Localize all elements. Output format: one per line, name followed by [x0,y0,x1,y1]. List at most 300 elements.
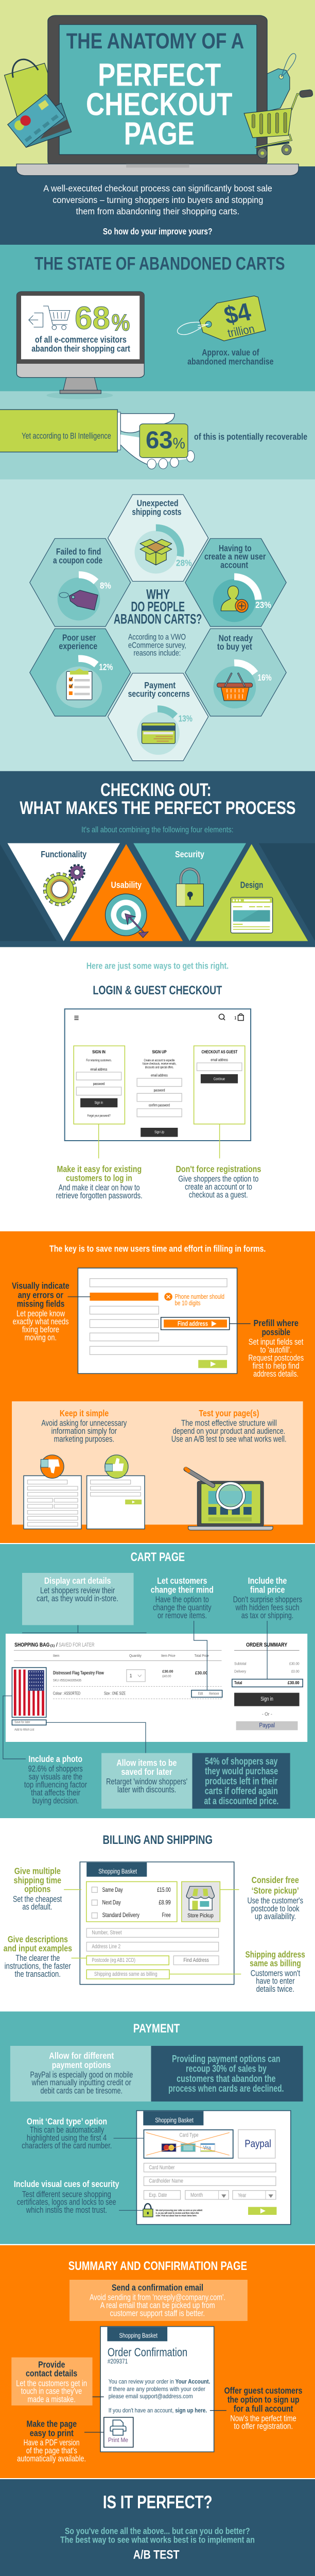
tip: easy to print: automatically available. [17,2454,86,2463]
intro text: them from abandoning their shopping carts. [76,206,239,216]
tip: confirmation email: Send a confirmation email [112,2282,203,2293]
form: sign up: email address [151,1073,168,1078]
heading: why do people abandon carts [114,587,202,627]
mockup: payment form [136,2111,291,2225]
caption: abandoned merchandise: Approx. value of [202,347,259,358]
icon: shopping cart [244,90,313,158]
shipping options: Standard Delivery [102,1911,139,1919]
icon: target with arrow [106,894,148,938]
address fields: Find Address [183,1957,209,1963]
tip: saved for later: later with discounts. [117,1785,176,1794]
bag header: SHOPPING BAG [14,1641,49,1648]
order heading: #209371 [108,2358,128,2365]
product details: £40.00 [162,1675,171,1678]
tip: keep it simple [41,1408,127,1444]
icon: 4 trillion price tag [178,296,266,341]
order summary: Subtotal [234,1662,247,1666]
tip: indicate errors: moving on. [25,1333,57,1342]
tip: contact details: Provide [38,2360,65,2370]
tip: keep it simple: Avoid asking for unnecessary [41,1418,127,1428]
connector lines [84,2397,226,2432]
product details: Distressed Flag Tapestry Flow [53,1671,104,1676]
survey note: According to a VWO [128,632,186,641]
panel: summary and confirmation page [11,2259,302,2463]
hexagon: payment security concerns: Payment [144,680,176,690]
laptop [16,15,299,176]
tip: payment options: when manually inputting credit or [31,2078,131,2087]
product details: 1 [130,1673,132,1679]
shipping options: Free [162,1911,171,1919]
icon: exit arrow [29,313,43,327]
hexagon: failed to find a coupon code [30,538,131,626]
icon: 4 trillion price tag: trillion [226,323,256,340]
order summary: £30.00 [288,1681,300,1685]
short form with thumbs up [87,1455,145,1529]
form: sign up: confirm password [149,1103,170,1108]
triangle: security: Security [175,849,204,860]
triangle: functionality: Functionality [41,849,86,860]
tip: indicate errors: fixing before [22,1325,59,1334]
card fields: Exp. Date [149,2192,167,2198]
product details: £30.00 [195,1670,207,1675]
form: sign in: For returning customers. [86,1059,112,1062]
hexagon: payment security concerns: 13% [179,714,192,723]
monitor: 68 percent stat [16,292,144,399]
security notice: it, so you will need to receive and then return the [155,2212,199,2215]
tip: keep it simple: information simply for [51,1426,117,1436]
print button [104,2417,133,2447]
hexagon: unexpected shipping costs: shipping costs [132,507,181,517]
tip: visual cues of security [14,2179,119,2215]
order body text: If there are any problems with your order [109,2385,205,2393]
tip: change their mind: or remove items. [157,1611,207,1620]
shipping options: £15.00 [157,1886,171,1893]
mockup: billing form [80,1862,234,1985]
title: THE ANATOMY OF A [66,28,244,53]
icon: price tag [265,54,296,112]
icon: thumbs up [105,1455,128,1478]
tip: same as billing: details twice. [256,1984,294,1994]
triangle: usability [70,844,183,941]
triangle: usability: Usability [111,880,142,890]
form: guest checkout: Continue [214,1077,225,1081]
error message: be 10 digits [175,1300,201,1307]
security notice [155,2209,203,2217]
tip: descriptions: and input examples [4,1943,72,1954]
triangle: design [196,844,308,941]
triangle: security [133,843,246,941]
tab: Shopping Basket [98,1868,137,1875]
stat: 68%: 68 [75,300,110,336]
order body text: If you don't have an account, sign up here. [109,2407,207,2414]
tab [143,2111,203,2125]
stat: 54 percent of shoppers [192,1753,290,1809]
address fields: Shipping address same as billing [94,1971,157,1977]
triangle: functionality [7,843,120,941]
order summary: Paypal [259,1722,275,1728]
intro text [43,183,272,236]
card fields: Month [190,2192,203,2198]
tip: confirmation email: Avoid sending it from 'noreply@company.com'. [90,2293,225,2302]
product details: SKU #5532443355435 [53,1678,81,1682]
hand holding 63 percent card [0,410,195,469]
address fields [86,1928,219,1979]
tip: change their mind: Have the option to [155,1595,209,1604]
tip: indicate errors: Let people know [16,1309,65,1318]
panel: why do people abandon carts [30,495,286,761]
tip: prefill: to 'autofill'. [260,1345,292,1354]
stat: 68%: % [112,310,130,336]
icon: gears [45,866,84,904]
panel: payment [10,2021,303,2225]
tip: payment options: Allow for different [49,2050,114,2061]
connector lines [68,1297,251,1324]
icon: cart bag [238,1014,243,1021]
panel: save new users time [12,1244,304,1530]
triangle background [0,843,315,941]
tip: existing customers: customers to log in [66,1173,132,1183]
intro text [60,2526,255,2545]
icon: error x [164,1293,172,1301]
hexagon: unexpected shipping costs: 28% [176,558,192,568]
tip: omit card type: Omit ‘Card type’ option [27,2116,107,2127]
error message [175,1293,224,1307]
product details: Size : ONE SIZE [104,1691,126,1696]
heading: billing and shipping: BILLING AND SHIPPING [102,1833,213,1847]
icon: menu [74,1016,79,1020]
icon: clipboard [66,668,92,700]
title: PAGE [124,116,195,151]
tip: don't force registrations [176,1164,261,1199]
tip: final price: Include the [248,1575,287,1586]
find address button [161,1317,230,1330]
icon: secure payment card [142,723,175,743]
tip: keep it simple: Keep it simple [60,1408,109,1419]
tip: contact details: Let the customers get in [16,2379,87,2388]
order heading [108,2346,187,2365]
bag header: Total Price [195,1654,209,1658]
heading [20,781,296,818]
mockup: order confirmation [100,2327,214,2452]
tab [107,2327,167,2341]
tip: include a photo: that affects their [31,1788,80,1798]
caption: abandoned merchandise: abandoned merchandise [187,357,274,366]
order summary: Delivery [234,1669,246,1673]
connector lines [114,2138,144,2210]
order body text [109,2378,210,2414]
tip: existing customers: Make it easy for existing [57,1164,142,1175]
heading: CART PAGE [131,1550,185,1564]
panel: is it perfect [10,2493,305,2576]
tip: contact details [11,2358,93,2405]
icon: browser window [231,897,273,933]
tip: payment options: debit cards can be tiresome. [40,2086,122,2095]
heading: IS IT PERFECT? [103,2493,213,2513]
hexagon: not ready to buy yet: to buy yet [217,641,252,652]
form: guest checkout [194,1046,245,1124]
card type option crossed out [144,2130,233,2158]
intro text: So how do your improve yours? [103,226,213,236]
tip: saved for later: saved for later [121,1767,172,1777]
tip: easy to print: Have a PDF version [24,2438,80,2447]
caption: of all e-commerce visitors [35,334,127,345]
product details: £30.00 [162,1669,173,1673]
triangle: design: Design [240,880,263,890]
address fields: Address Line 2 [92,1943,120,1950]
security notice: order. Find out about how to return items here. [155,2214,197,2217]
form: sign in: Sign in [94,1100,103,1105]
stat: 54 percent of shoppers: products left in their [205,1776,277,1787]
icon: 4 trillion price tag: $4 [221,298,254,330]
shipping options [86,1882,177,1922]
hand holding 63 percent card: 63 [146,426,173,453]
tip: saved for later [101,1753,192,1809]
tip: descriptions [4,1934,72,1979]
icon: printer [110,2420,126,2435]
caption: abandoned merchandise [187,347,274,366]
product photo: flag [12,1668,46,1717]
find address button: Find address [178,1320,208,1327]
mockup: form [78,1268,237,1374]
icon: open box [140,539,172,565]
card fields: Year [238,2192,247,2198]
tip: descriptions: Give descriptions [8,1934,68,1945]
tip: indicate errors: Visually indicate [12,1281,69,1291]
order summary: £30.00 [289,1662,300,1666]
tip: payment options: PayPal is especially good on mobile [30,2070,133,2079]
card fields [144,2163,276,2199]
tip: include a photo: 92.6% of shoppers [28,1764,83,1773]
form: sign up: Sign Up [154,1130,164,1134]
panel: state of abandoned carts [0,254,307,469]
store pickup [182,1882,220,1922]
tip: indicate errors: exactly what needs [13,1317,68,1326]
tip: payment options: payment options [52,2060,111,2071]
tip: saved for later: Allow items to be [116,1758,177,1768]
laptop with magnifying glass [186,1469,273,1530]
product details: Colour : ASSORTED [53,1691,80,1696]
icon: basket [217,673,253,701]
tip: don't force registrations: create an account or to [185,1182,252,1192]
caption: abandon their shopping cart [31,344,130,353]
heading: why do people abandon carts: ABANDON CARTS? [114,612,202,627]
address fields: Postcode (eg AB1 2CD) [92,1957,135,1963]
tip: final price: final price [250,1585,285,1595]
tip: shipping time: as default. [22,1902,52,1911]
icon: security lock [143,2204,153,2217]
hexagon: failed to find a coupon code: a coupon code [53,555,102,565]
tip: easy to print: of the page that's [26,2446,77,2455]
tip: confirmation email: customer support staff is better. [110,2309,205,2318]
tab: Shopping Basket [155,2116,194,2124]
store pickup: Store Pickup [187,1912,214,1919]
shipping options: Same Day [102,1886,123,1893]
form: sign in: password [93,1082,104,1086]
tip: descriptions: The clearer the [15,1953,60,1963]
tip: descriptions: the transaction. [14,1969,61,1979]
callout: ways to get this right: Here are just some ways to get this right. [86,961,229,971]
title: CHECKOUT [86,87,233,122]
bag header: Quantity [129,1654,142,1658]
tip: prefill: possible [262,1327,290,1337]
order summary: - Or - [262,1712,272,1717]
order summary: Sign in [260,1696,273,1702]
tip: visual cues of security: Include visual cues of security [14,2179,119,2190]
product details: Save for later [14,1720,30,1724]
icon: padlock [177,869,203,906]
tip: display cart details: Display cart details [44,1575,111,1586]
tip: include a photo: say visuals are the [29,1772,82,1782]
form: sign up: discounts and special offers. [145,1066,174,1069]
tab: Shopping Basket [119,2332,157,2339]
print button: Print Me [108,2436,128,2444]
tip: contact details: made a mistake. [27,2395,76,2404]
bag header: Item [53,1654,60,1658]
security notice: We start processing your order as soon as you submit [155,2209,203,2212]
tip: visual cues of security: which instils the most trust. [26,2205,107,2215]
hexagon: unexpected shipping costs: Unexpected [137,498,179,508]
tip: shipping time: Give multiple [14,1866,61,1876]
survey note [128,632,186,657]
form: guest checkout: email address [211,1058,228,1062]
title: PERFECT [98,58,221,93]
product details [12,1669,222,1732]
tip: include a photo: Include a photo [28,1754,82,1765]
tip: easy to print: Make the page [27,2419,77,2429]
hexagon: payment security concerns [108,673,208,761]
hexagon: create a new user account: create a new user [204,551,266,562]
tip: final price [233,1575,302,1620]
heading: why do people abandon carts: DO PEOPLE [131,600,185,615]
survey note: reasons include: [134,648,181,657]
hexagon: poor user experience [30,629,131,716]
subheading: It's all about combining the following four elements: [81,825,234,834]
tip: same as billing [246,1950,305,1994]
hexagon: poor user experience: Poor user [62,633,96,642]
hexagon: poor user experience: 12% [99,662,113,672]
error message: Phone number should [175,1293,224,1300]
tip: don't force registrations: Give shoppers the option to [178,1174,258,1183]
bag header: SAVED FOR LATER [59,1641,95,1648]
icon: shopping bag [5,59,60,117]
form: sign in: SIGN IN [92,1049,106,1054]
card fields: Card Number [149,2164,175,2171]
next button [198,1360,227,1368]
tip: change their mind: change the quantity [153,1603,212,1612]
order summary: ORDER SUMMARY [246,1641,288,1648]
tip: contact details: contact details [26,2368,77,2379]
mockup: login page: 1 [234,1015,236,1020]
tip: indicate errors: any errors or [18,1290,63,1300]
mockup: login page [65,1009,251,1141]
hexagon: create a new user account [185,538,286,626]
hexagon: center question [114,587,202,657]
icon: search [219,1014,225,1020]
order summary [232,1641,303,1730]
bag header: / [56,1641,58,1648]
icon: user with plus [221,586,248,613]
tip: don't force registrations: Don't force registrations [176,1164,261,1175]
panel: cart page tips [4,1753,305,1994]
heading: LOGIN & GUEST CHECKOUT [93,983,222,997]
tip: easy to print [17,2419,86,2463]
tip: same as billing: have to enter [256,1976,295,1986]
icon: credit cards [8,94,72,147]
order heading: Order Confirmation [108,2346,187,2359]
form: sign up: Create an account to expedite [144,1059,175,1062]
next button [248,2207,276,2215]
tip: keep it simple: marketing purposes. [54,1434,114,1444]
tip: display cart details: Let shoppers review their [40,1586,115,1595]
tip: change their mind: change their mind [151,1585,214,1595]
hand holding 63 percent card: % [173,434,185,452]
form: sign up: future checkouts, receive emails, [143,1062,177,1066]
bag header: (1) [50,1643,55,1648]
connector lines [64,1890,241,1974]
hexagon: payment security concerns: security concerns [128,689,190,699]
tip: omit card type: This can be automatically [30,2125,104,2134]
tab [86,1862,147,1877]
paypal option [238,2130,275,2158]
subheading: A/B test: A/B TEST [133,2548,180,2562]
tip: payment options [10,2046,151,2102]
connector lines [99,1124,220,1158]
tip: shipping time: Set the cheapest [13,1894,62,1904]
hexagon: create a new user account: account [220,560,249,570]
tip: indicate errors: missing fields [17,1299,64,1309]
card type option crossed out: Visa [203,2145,211,2151]
card type option crossed out: Card Type [180,2132,199,2138]
tip: saved for later: Retarget 'window shoppers' [106,1777,187,1786]
tip: change their mind: Let customers [157,1575,207,1586]
tip: existing customers: And make it clear on how to [59,1183,140,1192]
hexagon: not ready to buy yet: 16% [257,672,272,683]
form: guest checkout: CHECKOUT AS GUEST [201,1049,238,1054]
long form with thumbs down [24,1455,81,1529]
form: sign up: SIGN UP [152,1049,167,1054]
tip: confirmation email [69,2280,248,2321]
tip: change their mind [151,1575,214,1620]
tip: include a photo [24,1754,87,1805]
product details: Add to Wish List [14,1727,34,1732]
hexagon: failed to find a coupon code: Failed to find [56,547,101,556]
tip: test your pages [171,1408,287,1444]
order summary: £0.00 [291,1669,300,1673]
tip: store pickup [247,1875,303,1921]
bag header [14,1641,222,1660]
address fields: Number, Street [92,1929,122,1936]
tip: display cart details [22,1573,134,1625]
icon: purple tag [59,590,98,610]
survey note: eCommerce survey, [128,640,186,650]
panel: hero laptop header [5,15,313,236]
paypal option: Paypal [244,2138,271,2149]
tip: visual cues of security: certificates, logos and locks to see [17,2197,116,2207]
form: sign in: email address [91,1067,107,1072]
intro text: conversions – turning shoppers into buyers and stopping [52,195,263,205]
tip: shipping time: options [24,1884,50,1894]
form: sign in [74,1046,125,1124]
bag header: Item Price [161,1654,176,1658]
tip: existing customers: retrieve forgotten passwords. [56,1191,143,1200]
hexagon: unexpected shipping costs [108,495,208,581]
hexagon: create a new user account: 23% [255,600,271,610]
caption [31,334,130,353]
shipping options: £8.99 [159,1899,171,1906]
tip: visual cues of security: Test different secure shopping [22,2190,111,2199]
tip: contact details: touch in case they've [21,2386,82,2396]
hexagon: not ready to buy yet: Not ready [219,633,253,643]
